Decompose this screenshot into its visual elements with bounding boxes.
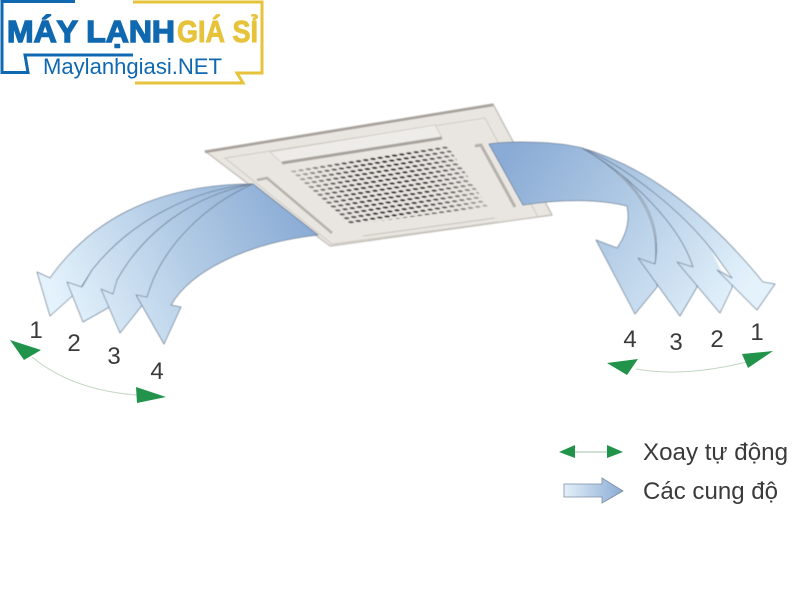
right swing indicator	[607, 351, 773, 375]
right swing head 4	[607, 359, 638, 375]
left swing curve	[32, 357, 137, 395]
left position numbers: 1	[29, 317, 43, 344]
left swing head 1	[10, 340, 41, 360]
panel right slot	[475, 145, 515, 207]
right swing head 1	[742, 351, 773, 368]
legend	[559, 439, 788, 505]
air conditioner panel	[205, 104, 552, 246]
right position numbers	[623, 319, 764, 356]
right arrow 4 with band	[489, 142, 657, 314]
left swing indicator	[10, 340, 166, 403]
left position numbers: 4	[150, 358, 164, 385]
left arrow 1	[37, 184, 253, 316]
left position numbers: 3	[107, 343, 121, 370]
left arrow 3	[101, 184, 253, 333]
logo frame: blue	[2, 2, 133, 72]
panel inner outline	[225, 118, 538, 244]
panel bottom slot	[363, 218, 497, 241]
panel top edge	[205, 105, 493, 152]
left arrow 4 with band	[136, 184, 318, 344]
right airflow arrows	[489, 142, 775, 316]
right arrow 3	[582, 148, 697, 316]
right arrow 1 notch gap	[711, 250, 731, 277]
logo frame: yellow	[133, 2, 262, 83]
legend label: airflow arcs: Các cung độ	[643, 478, 778, 505]
logo website: Maylanhgiasi.NET	[43, 54, 222, 79]
logo	[2, 2, 262, 83]
left arrow 2	[67, 184, 253, 322]
right position numbers: 4	[623, 326, 637, 353]
right position numbers: 2	[710, 326, 724, 353]
panel left slot	[257, 178, 332, 233]
panel grille dots	[288, 145, 488, 225]
right swing curve	[636, 362, 747, 372]
left position numbers	[29, 317, 164, 385]
right arrow 1	[582, 148, 775, 310]
legend label: auto swing: Xoay tự động	[643, 439, 788, 466]
right position numbers: 1	[750, 319, 764, 346]
right position numbers: 3	[669, 329, 683, 356]
legend icon: airflow arrow	[564, 478, 623, 503]
left position numbers: 2	[67, 330, 81, 357]
right arrow 2	[582, 148, 732, 313]
left swing head 4	[136, 387, 166, 403]
legend icon: auto swing arrow	[559, 445, 623, 458]
panel top slot	[270, 125, 442, 163]
left airflow arrows	[37, 184, 318, 344]
panel body	[205, 104, 552, 246]
logo wordmark: yellow: GIÁ SỈ	[177, 14, 258, 49]
logo wordmark: blue: MÁY LẠNH	[7, 14, 175, 49]
